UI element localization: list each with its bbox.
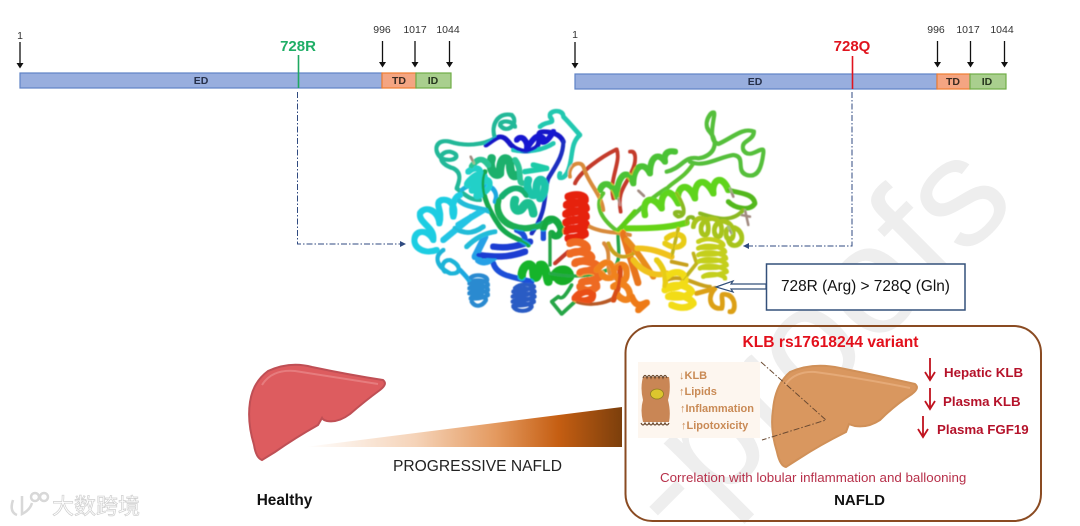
- protein ribbon structure: [414, 111, 763, 314]
- olive-yellow helix, right: [693, 218, 742, 245]
- position labels: 1044: [436, 24, 460, 36]
- position arrows: [16, 41, 453, 68]
- panel: variant protein domain bar 728Q: [572, 24, 1014, 89]
- dark red and red thin loops: [555, 149, 635, 263]
- variant marker line: [852, 56, 854, 89]
- arrow: 728Q to protein: [743, 92, 852, 246]
- source watermark logo: [12, 489, 140, 521]
- effect: hepatic KLB: [925, 358, 1023, 380]
- domain TD: [937, 74, 970, 89]
- position labels: 996: [927, 24, 945, 36]
- dark blue coil top: [517, 132, 553, 148]
- position labels: 1: [17, 30, 23, 42]
- arrow: 728R to protein: [298, 92, 406, 244]
- yellow-green helix, stacked: [698, 239, 727, 278]
- green wide ribbon: [498, 200, 552, 228]
- orange sheets: [623, 233, 638, 283]
- inset effects list: ↑Lipotoxicity: [681, 420, 749, 432]
- position arrows: [572, 41, 1008, 68]
- label: healthy: Healthy: [257, 492, 313, 509]
- orange-red bottom: [575, 291, 593, 301]
- variant marker line: [298, 55, 300, 88]
- inset effects list: [679, 370, 754, 432]
- yellow upper loops: [657, 234, 684, 287]
- orange-red helix: [570, 242, 600, 291]
- hollow pointer arrow: [716, 281, 766, 292]
- icon: hepatocyte cell: [641, 376, 670, 425]
- heading: KLB rs17618244 variant: [743, 334, 918, 351]
- label: progressive NAFLD: PROGRESSIVE NAFLD: [393, 458, 562, 475]
- domain ID: [970, 74, 1006, 89]
- progression wedge: [305, 407, 622, 447]
- orange thin loops: [570, 163, 630, 278]
- panel: wild-type protein domain bar 728R: [16, 24, 460, 88]
- teal-green helix, upper: [491, 158, 517, 176]
- bright lime sheets: [627, 223, 687, 228]
- effect: plasma FGF19: [918, 416, 1029, 437]
- yellow helix, centre: [665, 272, 693, 308]
- teal helix, lower: [514, 200, 533, 213]
- domain ED: [20, 73, 382, 88]
- domain TD: [382, 73, 416, 88]
- domain ED: [575, 74, 937, 89]
- inset effects list: ↓KLB: [679, 370, 707, 382]
- green tail on bright lime helix: [728, 190, 755, 208]
- domain ID: ID: [982, 76, 993, 88]
- bright lime helix: [644, 180, 728, 215]
- lime helix, upper: [600, 151, 675, 197]
- position labels: [572, 24, 1014, 41]
- icon: healthy liver: [249, 365, 385, 460]
- dark blue sheets: [478, 242, 530, 256]
- position labels: [17, 24, 460, 42]
- position labels: 1: [572, 29, 578, 41]
- panel: NAFLD: [626, 326, 1041, 521]
- green thin loops, bottom: [550, 231, 619, 314]
- cyan and sky blue sheets: [443, 210, 483, 240]
- red helix: [566, 195, 586, 238]
- green helix, bottom: [522, 265, 548, 282]
- callout box: [766, 264, 965, 310]
- green thin loop top right: [667, 112, 763, 176]
- callout: 728R to 728Q: [716, 264, 965, 310]
- position labels: 996: [373, 24, 391, 36]
- domain TD: TD: [946, 76, 960, 88]
- variant label 728Q: 728Q: [834, 38, 871, 55]
- logo mark: [12, 493, 48, 515]
- lime thin loops: [599, 163, 693, 231]
- variant label 728R: 728R: [280, 38, 316, 55]
- domain ED: ED: [748, 76, 763, 88]
- olive loops: [675, 193, 743, 223]
- panel border: [626, 326, 1041, 521]
- position labels: 1044: [990, 24, 1014, 36]
- dark blue thin top and descending strand: [486, 132, 563, 151]
- logo text: 大数跨境: [52, 489, 140, 521]
- correlation note: Correlation with lobular inflammation and ballooning: [660, 470, 966, 485]
- teal helix, centre: [527, 180, 545, 198]
- position labels: 1017: [403, 24, 427, 36]
- icon: NAFLD liver: [772, 366, 917, 467]
- inset background: [638, 362, 760, 438]
- zoom guide lines: [761, 362, 826, 440]
- ligand sticks: [471, 157, 750, 233]
- effect: plasma FGF19: Plasma FGF19: [937, 422, 1029, 437]
- label: NAFLD: NAFLD: [834, 492, 885, 509]
- inset: hepatocyte: [638, 362, 760, 438]
- effect: plasma KLB: [925, 388, 1021, 409]
- ochre and yellow strands: [633, 248, 672, 275]
- cyan helix, left: [414, 195, 460, 251]
- amber loop, bottom right: [697, 288, 734, 312]
- cyan inner helix: [461, 166, 492, 198]
- inset effects list: ↑Lipids: [679, 386, 717, 398]
- blue coil, bottom left: [469, 275, 488, 306]
- domain ID: [416, 73, 451, 88]
- inset effects list: ↑Inflammation: [680, 403, 754, 415]
- thin teal loops, top left: [436, 114, 515, 200]
- callout text: 728R (Arg) > 728Q (Gln): [781, 278, 950, 295]
- cyan filler ribbons between helix and core: [455, 200, 495, 247]
- domain ED: ED: [194, 75, 209, 87]
- domain ID: ID: [428, 75, 439, 87]
- position labels: 1017: [956, 24, 980, 36]
- blue coil, bottom centre: [513, 284, 535, 311]
- effect: hepatic KLB: Hepatic KLB: [944, 365, 1023, 380]
- domain TD: TD: [392, 75, 406, 87]
- orange helix, lower centre: [597, 262, 630, 300]
- effect: plasma KLB: Plasma KLB: [943, 394, 1021, 409]
